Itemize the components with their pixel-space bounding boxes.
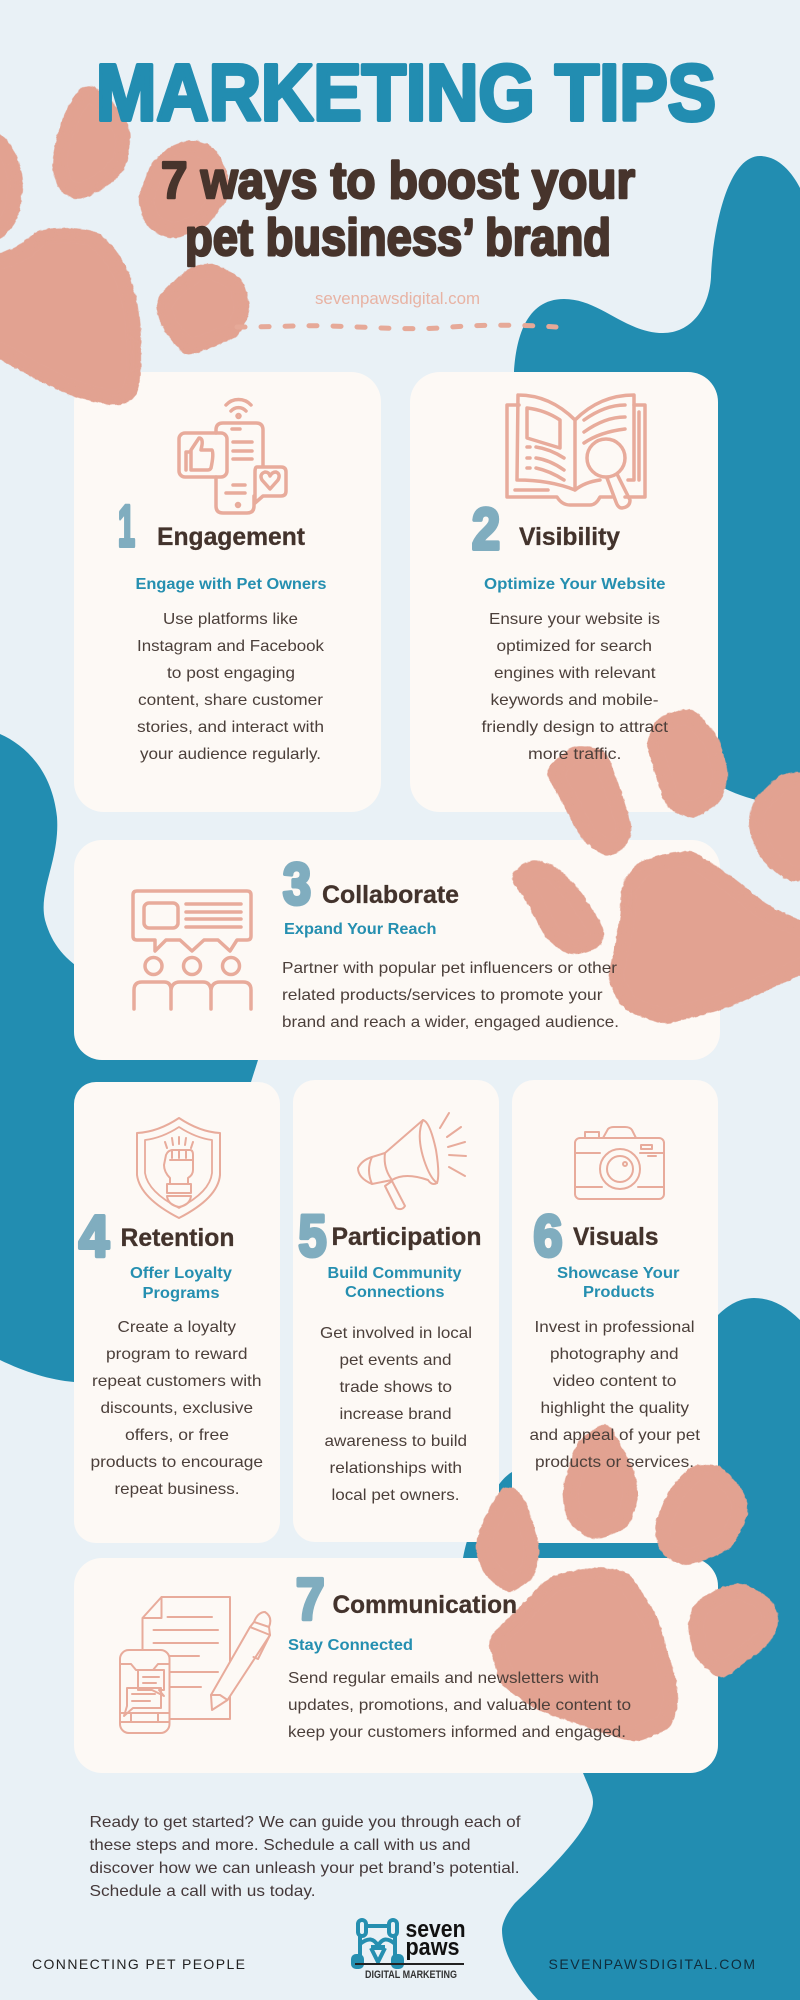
icon: phone with likes and wifi [179,400,286,513]
icon: dog [353,1920,402,1967]
subheading [328,1265,462,1301]
card 2: visibility [472,395,669,763]
body text: video content to [553,1373,677,1390]
body text [288,1670,631,1741]
panel: card 3 background [74,840,720,1060]
website link: sevenpawsdigital.com [315,289,480,308]
body text: awareness to build [324,1433,467,1450]
body text: Partner with popular pet influencers or other [282,960,618,977]
call to action text: Ready to get started? We can guide you through each of [90,1814,521,1831]
number 7: 7 [296,1567,324,1632]
body text: trade shows to [340,1379,452,1396]
subheading: Showcase Your [557,1265,680,1282]
body text: repeat business. [114,1481,240,1498]
body text: pet events and [340,1352,452,1369]
number 4: 4 [79,1204,109,1269]
footer tagline: CONNECTING PET PEOPLE [32,1956,245,1972]
body text: optimized for search [496,638,652,655]
body text: local pet owners. [332,1487,460,1504]
heading: Communication [332,1591,517,1619]
body text: photography and [550,1346,678,1363]
number 2: 2 [472,497,500,562]
card 7: communication [120,1567,631,1741]
body text: more traffic. [528,746,622,763]
body text [282,960,619,1031]
subtitle [161,152,635,267]
wordmark: seven [406,1916,466,1943]
heading: Engagement [157,523,306,551]
blob: bottom right blue [463,1298,800,2000]
subheading: Connections [345,1284,445,1301]
subheading [557,1265,680,1301]
number 5: 5 [298,1204,326,1269]
icon: camera [575,1127,664,1199]
body text: program to reward [106,1346,248,1363]
subheading: Programs [142,1285,220,1302]
heading: Visibility [519,523,620,551]
body text: friendly design to attract [482,719,669,736]
body text [90,1319,263,1498]
panel: card 7 background [74,1558,718,1773]
body text: Send regular emails and newsletters with [288,1670,599,1687]
body text: brand and reach a wider, engaged audience. [282,1014,619,1031]
number 1: 1 [118,494,135,559]
body text: keywords and mobile- [490,692,658,709]
body text: relationships with [330,1460,462,1477]
subheading: Engage with Pet Owners [136,576,327,593]
subheading: Expand Your Reach [284,921,436,938]
body text: products or services. [535,1454,694,1471]
body text: related products/services to promote your [282,987,603,1004]
body text: increase brand [340,1406,452,1423]
icon: book with magnifier [507,395,645,508]
heading: Visuals [573,1223,658,1251]
body text: offers, or free [125,1427,229,1444]
blob: top right blue [514,156,800,806]
call to action text: these steps and more. Schedule a call with us and [90,1837,471,1854]
body text [320,1325,472,1504]
body text: Instagram and Facebook [137,638,325,655]
blob: left blue [0,734,258,1382]
body text: Get involved in local [320,1325,472,1342]
body text [482,611,669,763]
body text: discounts, exclusive [100,1400,253,1417]
subheading [130,1265,232,1302]
wordmark: paws [406,1934,460,1961]
footer website: SEVENPAWSDIGITAL.COM [548,1956,755,1972]
dashed line [237,325,556,329]
body text: Use platforms like [163,611,298,628]
subtitle: 7 ways to boost your [161,152,635,210]
subheading: Products [583,1284,655,1301]
panel: card 4 background [74,1082,280,1543]
subtitle: pet business’ brand [185,209,611,267]
body text: to post engaging [167,665,295,682]
subheading: Offer Loyalty [130,1265,232,1282]
body text: your audience regularly. [140,746,321,763]
body text: updates, promotions, and valuable content to [288,1697,631,1714]
icon: document, phone and pen [120,1597,270,1733]
body text: Invest in professional [534,1319,694,1336]
body text: stories, and interact with [137,719,324,736]
panel: card 1 background [74,372,381,812]
logo tagline: DIGITAL MARKETING [365,1969,457,1981]
body text: highlight the quality [540,1400,689,1417]
body text: repeat customers with [92,1373,262,1390]
panel: card 6 background [512,1080,718,1543]
card 3: collaborate [133,852,619,1031]
body text: and appeal of your pet [530,1427,701,1444]
heading: Retention [120,1224,234,1252]
number 6: 6 [534,1204,562,1269]
body text: keep your customers informed and engaged. [288,1724,626,1741]
body text: products to encourage [90,1454,263,1471]
icon: shield with fist [137,1118,220,1218]
card 5: participation [298,1113,482,1504]
paw print: middle right [509,708,800,1024]
number 3: 3 [283,852,311,917]
heading: Participation [332,1223,482,1251]
body text: Create a loyalty [118,1319,236,1336]
subheading: Build Community [328,1265,462,1282]
icon: three people with speech bubble [133,891,251,1009]
panel: card 2 background [410,372,718,812]
paw print: top left [0,85,250,405]
subheading: Stay Connected [288,1637,413,1654]
heading: Collaborate [322,881,459,909]
subheading: Optimize Your Website [484,576,666,593]
call to action text: Schedule a call with us today. [90,1883,316,1900]
body text: content, share customer [138,692,324,709]
logo: seven paws [353,1916,466,1981]
icon: megaphone [358,1113,466,1209]
body text [137,611,325,763]
call to action text [90,1814,521,1900]
title: MARKETING TIPS [96,48,716,137]
card 4: retention [79,1118,263,1498]
card 6: visuals [530,1127,701,1471]
panel: card 5 background [293,1080,499,1542]
call to action text: discover how we can unleash your pet brand’s potential. [90,1860,520,1877]
card 1: engagement [118,400,327,763]
body text: Ensure your website is [489,611,660,628]
body text: engines with relevant [494,665,656,682]
paw print: bottom right [475,1421,779,1742]
wordmark [406,1916,466,1961]
body text [530,1319,701,1471]
